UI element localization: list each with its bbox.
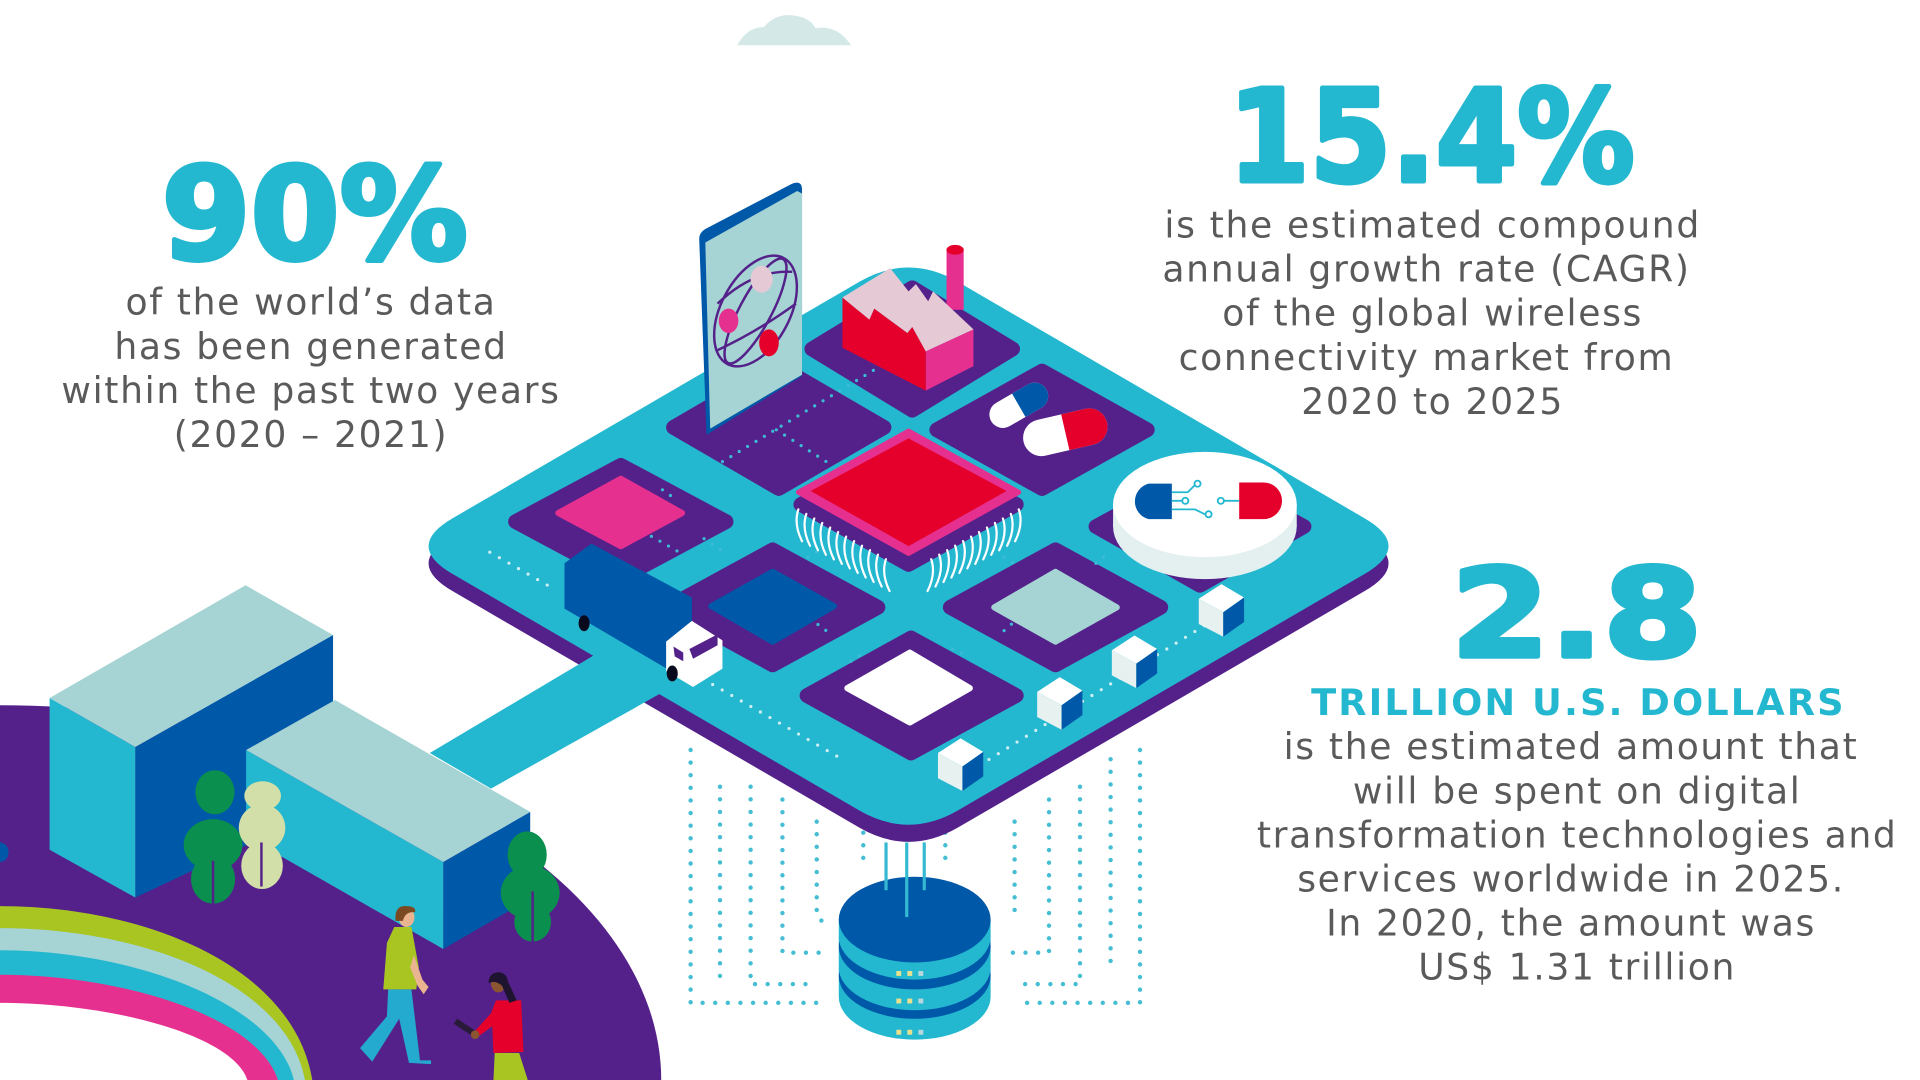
stat description: CAGR: of the global wireless [1222, 292, 1643, 335]
stat: 2.8 trillion [1257, 542, 1897, 989]
stat description: digital transformation spend [1257, 725, 1897, 989]
stat description: CAGR [1162, 204, 1701, 423]
cubes [938, 584, 1244, 791]
data connection dots [691, 750, 1140, 1003]
stat description: digital transformation spend: US$ 1.31 trillion [1418, 946, 1736, 989]
stat description: digital transformation spend: In 2020, the amount was [1326, 902, 1816, 945]
icon: tree right [501, 831, 560, 942]
person: man walking [360, 906, 431, 1064]
road [430, 644, 661, 789]
stat description: digital transformation spend: services worldwide in 2025. [1297, 857, 1845, 900]
stat: 15.4 percent [1162, 64, 1701, 423]
icon: factory [842, 245, 973, 391]
icon: tree pale [239, 781, 285, 889]
stat description: world's data [61, 281, 561, 456]
icon: pills [984, 378, 1111, 460]
ground with rainbow [0, 705, 661, 1080]
stat description: world's data: within the past two years [61, 369, 561, 412]
chip [797, 431, 1021, 591]
building: tall [50, 585, 333, 898]
stat heading: TRILLION U.S. DOLLARS [1311, 681, 1846, 724]
platform top [429, 268, 1389, 825]
platform tiles [516, 288, 1304, 753]
stat number: 15.4%: 15.4% [1228, 64, 1635, 212]
icon: disc with capsule and circuit [1113, 452, 1297, 579]
stat description: digital transformation spend: transformation technologies and [1257, 813, 1897, 856]
stat number: 90%: 90% [162, 141, 468, 289]
icon: phone with globe [697, 183, 814, 435]
dotted circuit traces [490, 370, 1206, 765]
icon: truck [564, 544, 722, 687]
stat description: CAGR: annual growth rate (CAGR) [1162, 248, 1691, 291]
person: woman with phone [456, 972, 528, 1080]
stat description: world's data: (2020 – 2021) [174, 413, 448, 456]
stat: 90 percent [61, 141, 561, 456]
stat description: digital transformation spend: will be spent on digital [1353, 769, 1801, 812]
icon: cloud [737, 15, 851, 45]
stat description: CAGR: 2020 to 2025 [1301, 380, 1564, 423]
icon: tree dark [184, 770, 242, 904]
stat description: CAGR: is the estimated compound [1164, 204, 1701, 247]
database [839, 842, 991, 1040]
building: long [246, 700, 530, 949]
stat number: 2.8: 2.8 [1451, 542, 1702, 685]
platform base [429, 285, 1389, 842]
stat description: world's data: has been generated [114, 325, 508, 368]
tile inner squares [558, 479, 1117, 722]
stat description: CAGR: connectivity market from [1179, 336, 1674, 379]
stat description: digital transformation spend: is the estimated amount that [1284, 725, 1858, 768]
stat description: world's data: of the world’s data [126, 281, 497, 324]
